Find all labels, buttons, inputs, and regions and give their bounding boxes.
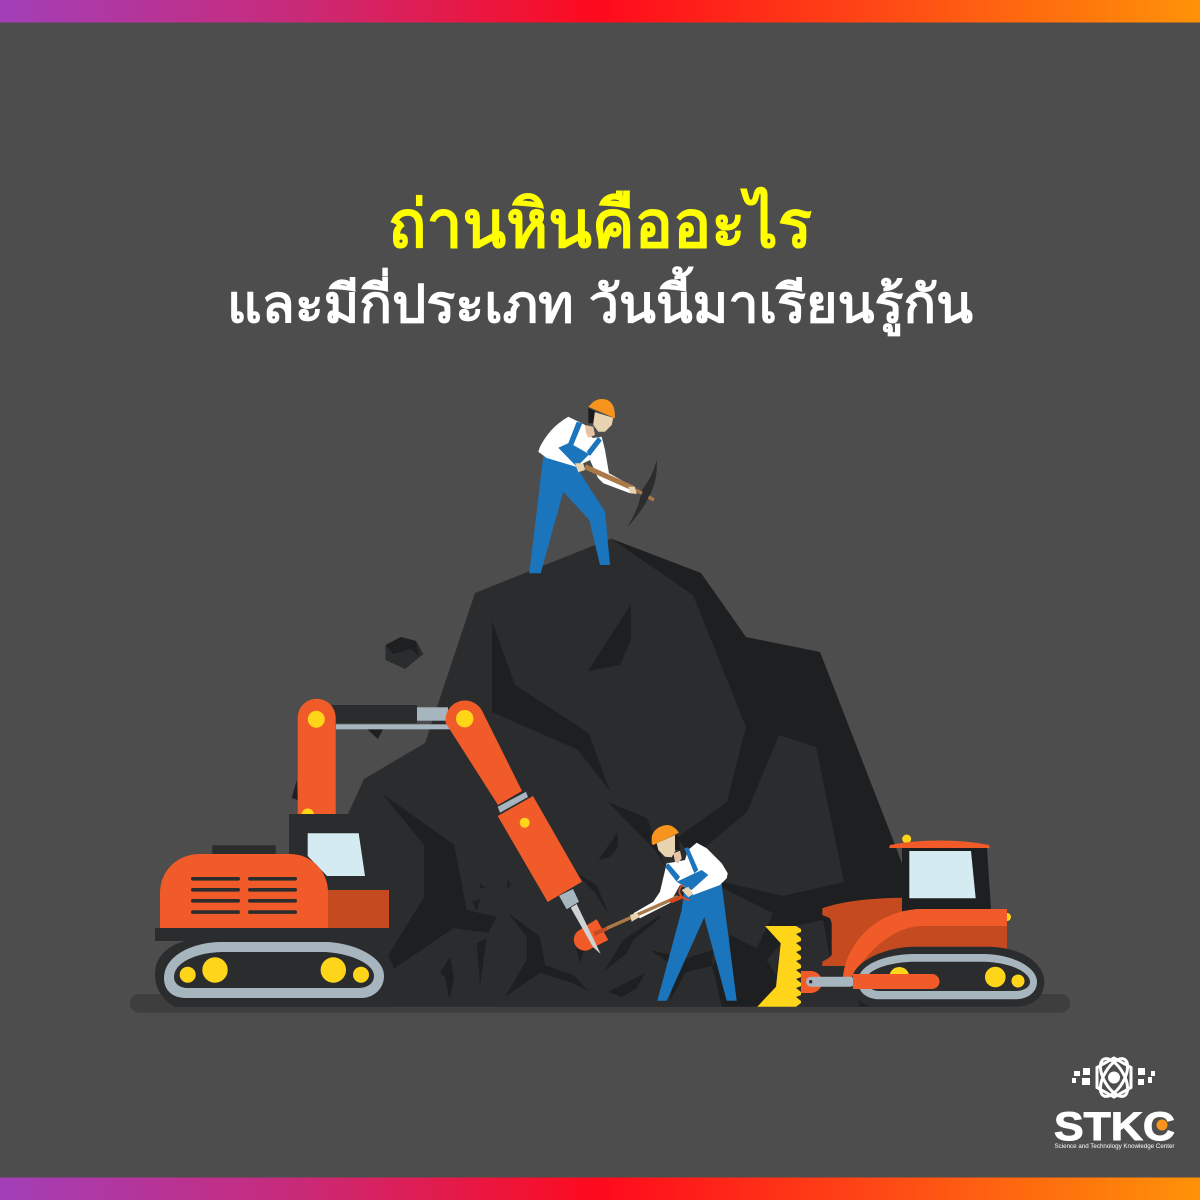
shovel handle [607, 897, 678, 928]
STKC logo [1054, 1054, 1175, 1150]
excavator [155, 699, 450, 1007]
pickaxe head [627, 460, 657, 527]
shovel socket [668, 895, 683, 903]
helmet [652, 825, 679, 845]
vertical arm [298, 699, 336, 814]
face [657, 835, 677, 857]
dozer body [843, 909, 1007, 977]
coal pile [340, 539, 915, 1007]
logo orange dot [1156, 1120, 1168, 1130]
hair [588, 408, 595, 423]
helmet [588, 399, 615, 418]
bulldozer [757, 834, 1044, 1007]
hydraulic bars [331, 705, 450, 729]
bib [558, 443, 589, 467]
excavator cab [289, 814, 365, 890]
top worker [529, 399, 657, 573]
title line 2: และมีกี่ประเภท วันนี้มาเรียนรู้กัน [227, 266, 973, 337]
neck [673, 851, 682, 863]
pick handle [585, 467, 633, 488]
logo wordmark: STKC [1054, 1105, 1175, 1149]
hands [575, 463, 637, 494]
logo atom mark [1095, 1054, 1133, 1101]
logo side pixels [1072, 1068, 1155, 1085]
shirt [538, 417, 633, 493]
lower hand [630, 913, 640, 922]
logo tagline: Science and Technology Knowledge Center [1054, 1144, 1175, 1150]
coal bits behind excavator arm [292, 729, 383, 800]
neck [585, 425, 595, 438]
pants [657, 883, 737, 1001]
dozer cab [889, 834, 991, 909]
shirt [633, 843, 728, 918]
dozer ram [801, 971, 940, 993]
title [227, 186, 973, 337]
straps [568, 422, 602, 456]
title line 1: ถ่านหินคืออะไร [388, 186, 812, 261]
straps [665, 847, 698, 882]
bib [677, 870, 708, 890]
wedge beside blade [767, 945, 780, 975]
hair [675, 835, 680, 850]
pants [529, 456, 610, 573]
lower worker [607, 825, 737, 1001]
dozer rear fender [822, 898, 902, 966]
back rock in shadow [500, 539, 915, 1007]
pick head block [640, 491, 650, 502]
face [593, 412, 613, 432]
dozer rear light [1007, 913, 1011, 921]
excavator platform [155, 928, 389, 941]
facet below band [723, 888, 773, 948]
engine cover [160, 845, 328, 928]
rock right of blade [796, 920, 860, 1007]
excavator boom [445, 701, 601, 954]
vents [191, 877, 297, 914]
right facet [690, 735, 844, 896]
floating coal chunk [386, 637, 423, 669]
shovel grip ring [679, 885, 689, 900]
dozer track [852, 947, 1044, 1007]
cracks [492, 621, 610, 792]
shovel blade [574, 919, 608, 951]
ground shadow [130, 994, 1070, 1013]
dark orange rear box [328, 890, 389, 928]
main light rock [340, 539, 746, 1007]
top gradient bar [0, 0, 1200, 22]
dozer blade [757, 926, 801, 1007]
excavator track [155, 941, 393, 1007]
bottom gradient bar [0, 1178, 1200, 1200]
upper hand [682, 887, 693, 897]
